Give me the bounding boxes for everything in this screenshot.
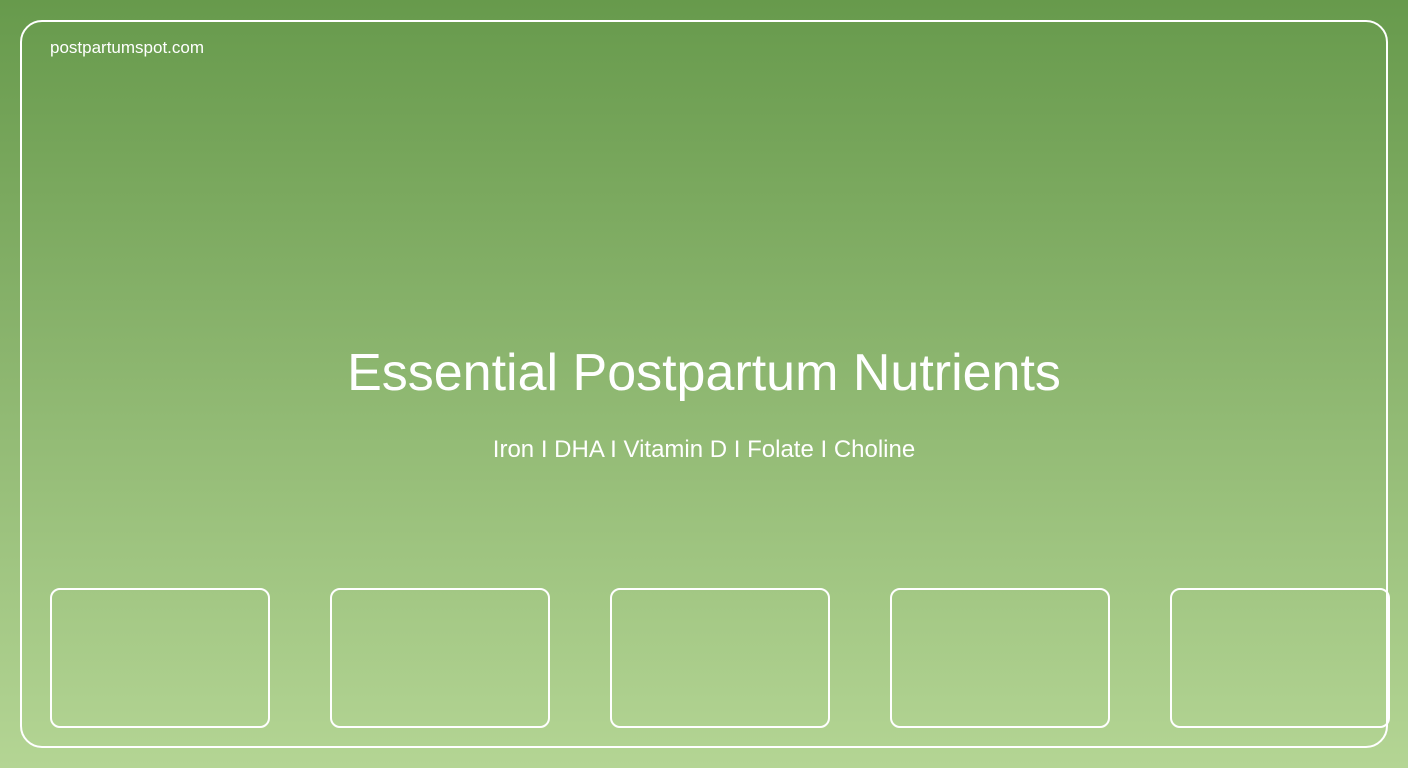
card 5 [1170, 588, 1390, 728]
title: Essential Postpartum Nutrients [347, 344, 1061, 402]
card 3 [610, 588, 830, 728]
card 1 [50, 588, 270, 728]
card 2 [330, 588, 550, 728]
site url: postpartumspot.com [50, 38, 204, 57]
subtitle: Iron I DHA I Vitamin D I Folate I Choline [493, 436, 915, 463]
card 4 [890, 588, 1110, 728]
